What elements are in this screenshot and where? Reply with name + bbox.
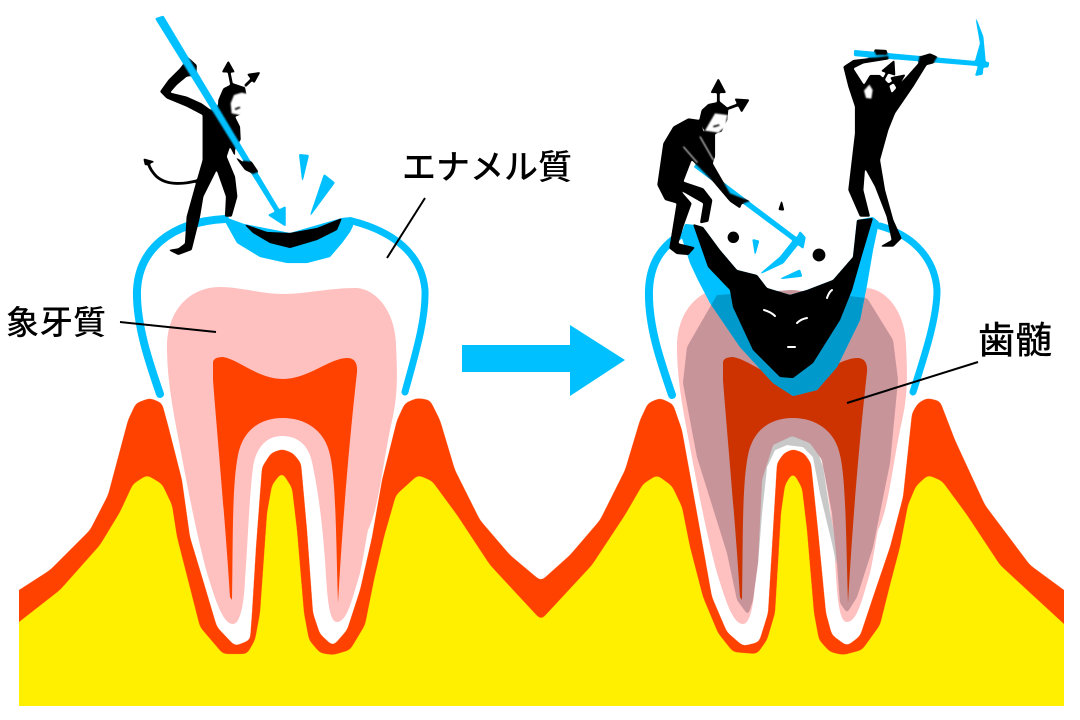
tooth 2: enamel left side (649, 235, 680, 395)
leader line: enamel (387, 198, 425, 258)
rock (728, 232, 739, 243)
devil 1: tail tip (143, 158, 155, 166)
label: dentin: 象牙質 (6, 304, 106, 341)
tooth 1: dentin (167, 287, 397, 624)
devil 2: mouth (713, 125, 719, 127)
leader line: dentin (120, 322, 216, 332)
flying shard (752, 239, 759, 256)
flying shard (299, 154, 309, 183)
darker enamel (711, 291, 865, 396)
tooth 2: dentin (677, 287, 907, 624)
label: pulp: 歯髄 (978, 320, 1052, 361)
rock chip (778, 200, 784, 211)
tooth 1: pulp (213, 357, 357, 603)
tooth 2: enamel around cavity (681, 217, 879, 396)
tooth 1: cavity decay (244, 218, 342, 248)
jawbone: yellow inner layer (4, 472, 1076, 718)
devil 3: body (843, 53, 937, 247)
tooth 1: enamel right side (352, 221, 425, 392)
tooth 2: white glints (764, 290, 832, 347)
devil 3: hand (874, 49, 887, 55)
gums and jawbone (4, 398, 1076, 718)
devil 1: body (160, 57, 258, 255)
devil 2: pickaxe (693, 163, 806, 275)
tooth 2: enamel right side (880, 226, 937, 392)
tooth 2: darkened pulp (723, 357, 867, 603)
devil 2: antennae (713, 81, 747, 110)
devil 2: face (705, 113, 727, 133)
tooth 1: enamel left side (137, 219, 225, 394)
devil 3: face (864, 85, 873, 99)
devil 3: pickaxe (854, 15, 989, 76)
devil 2: body (657, 118, 750, 255)
devil 3: antennae (883, 62, 903, 86)
tooth 2 (649, 217, 937, 624)
tooth 2: enamel over dentin (711, 291, 865, 396)
leader line: pulp (847, 362, 978, 403)
devil 1: tail (148, 163, 200, 183)
tooth 1: enamel around cavity (222, 216, 353, 263)
rock (813, 249, 825, 261)
tooth 2: darkened dentin (683, 290, 898, 615)
tooth 1 (137, 216, 425, 624)
tooth 2: grey damage band (756, 435, 837, 567)
flying shard (778, 269, 802, 279)
devil 1: hand on spear (243, 161, 258, 174)
devil with spear (143, 16, 335, 255)
progression arrow (462, 325, 625, 396)
devil 1: antennae (224, 63, 258, 86)
devils with pickaxes (657, 15, 989, 279)
gum: red outer layer (19, 398, 1064, 655)
tooth 2: cavity decay (693, 218, 873, 378)
devil 2: arm highlight (683, 137, 713, 163)
devil 1: mouth (235, 107, 240, 109)
devil 1: face (231, 93, 247, 115)
flying shard (309, 174, 335, 217)
spear (155, 16, 286, 227)
label: enamel: エナメル質 (402, 149, 572, 187)
devil 2: head (699, 102, 728, 134)
